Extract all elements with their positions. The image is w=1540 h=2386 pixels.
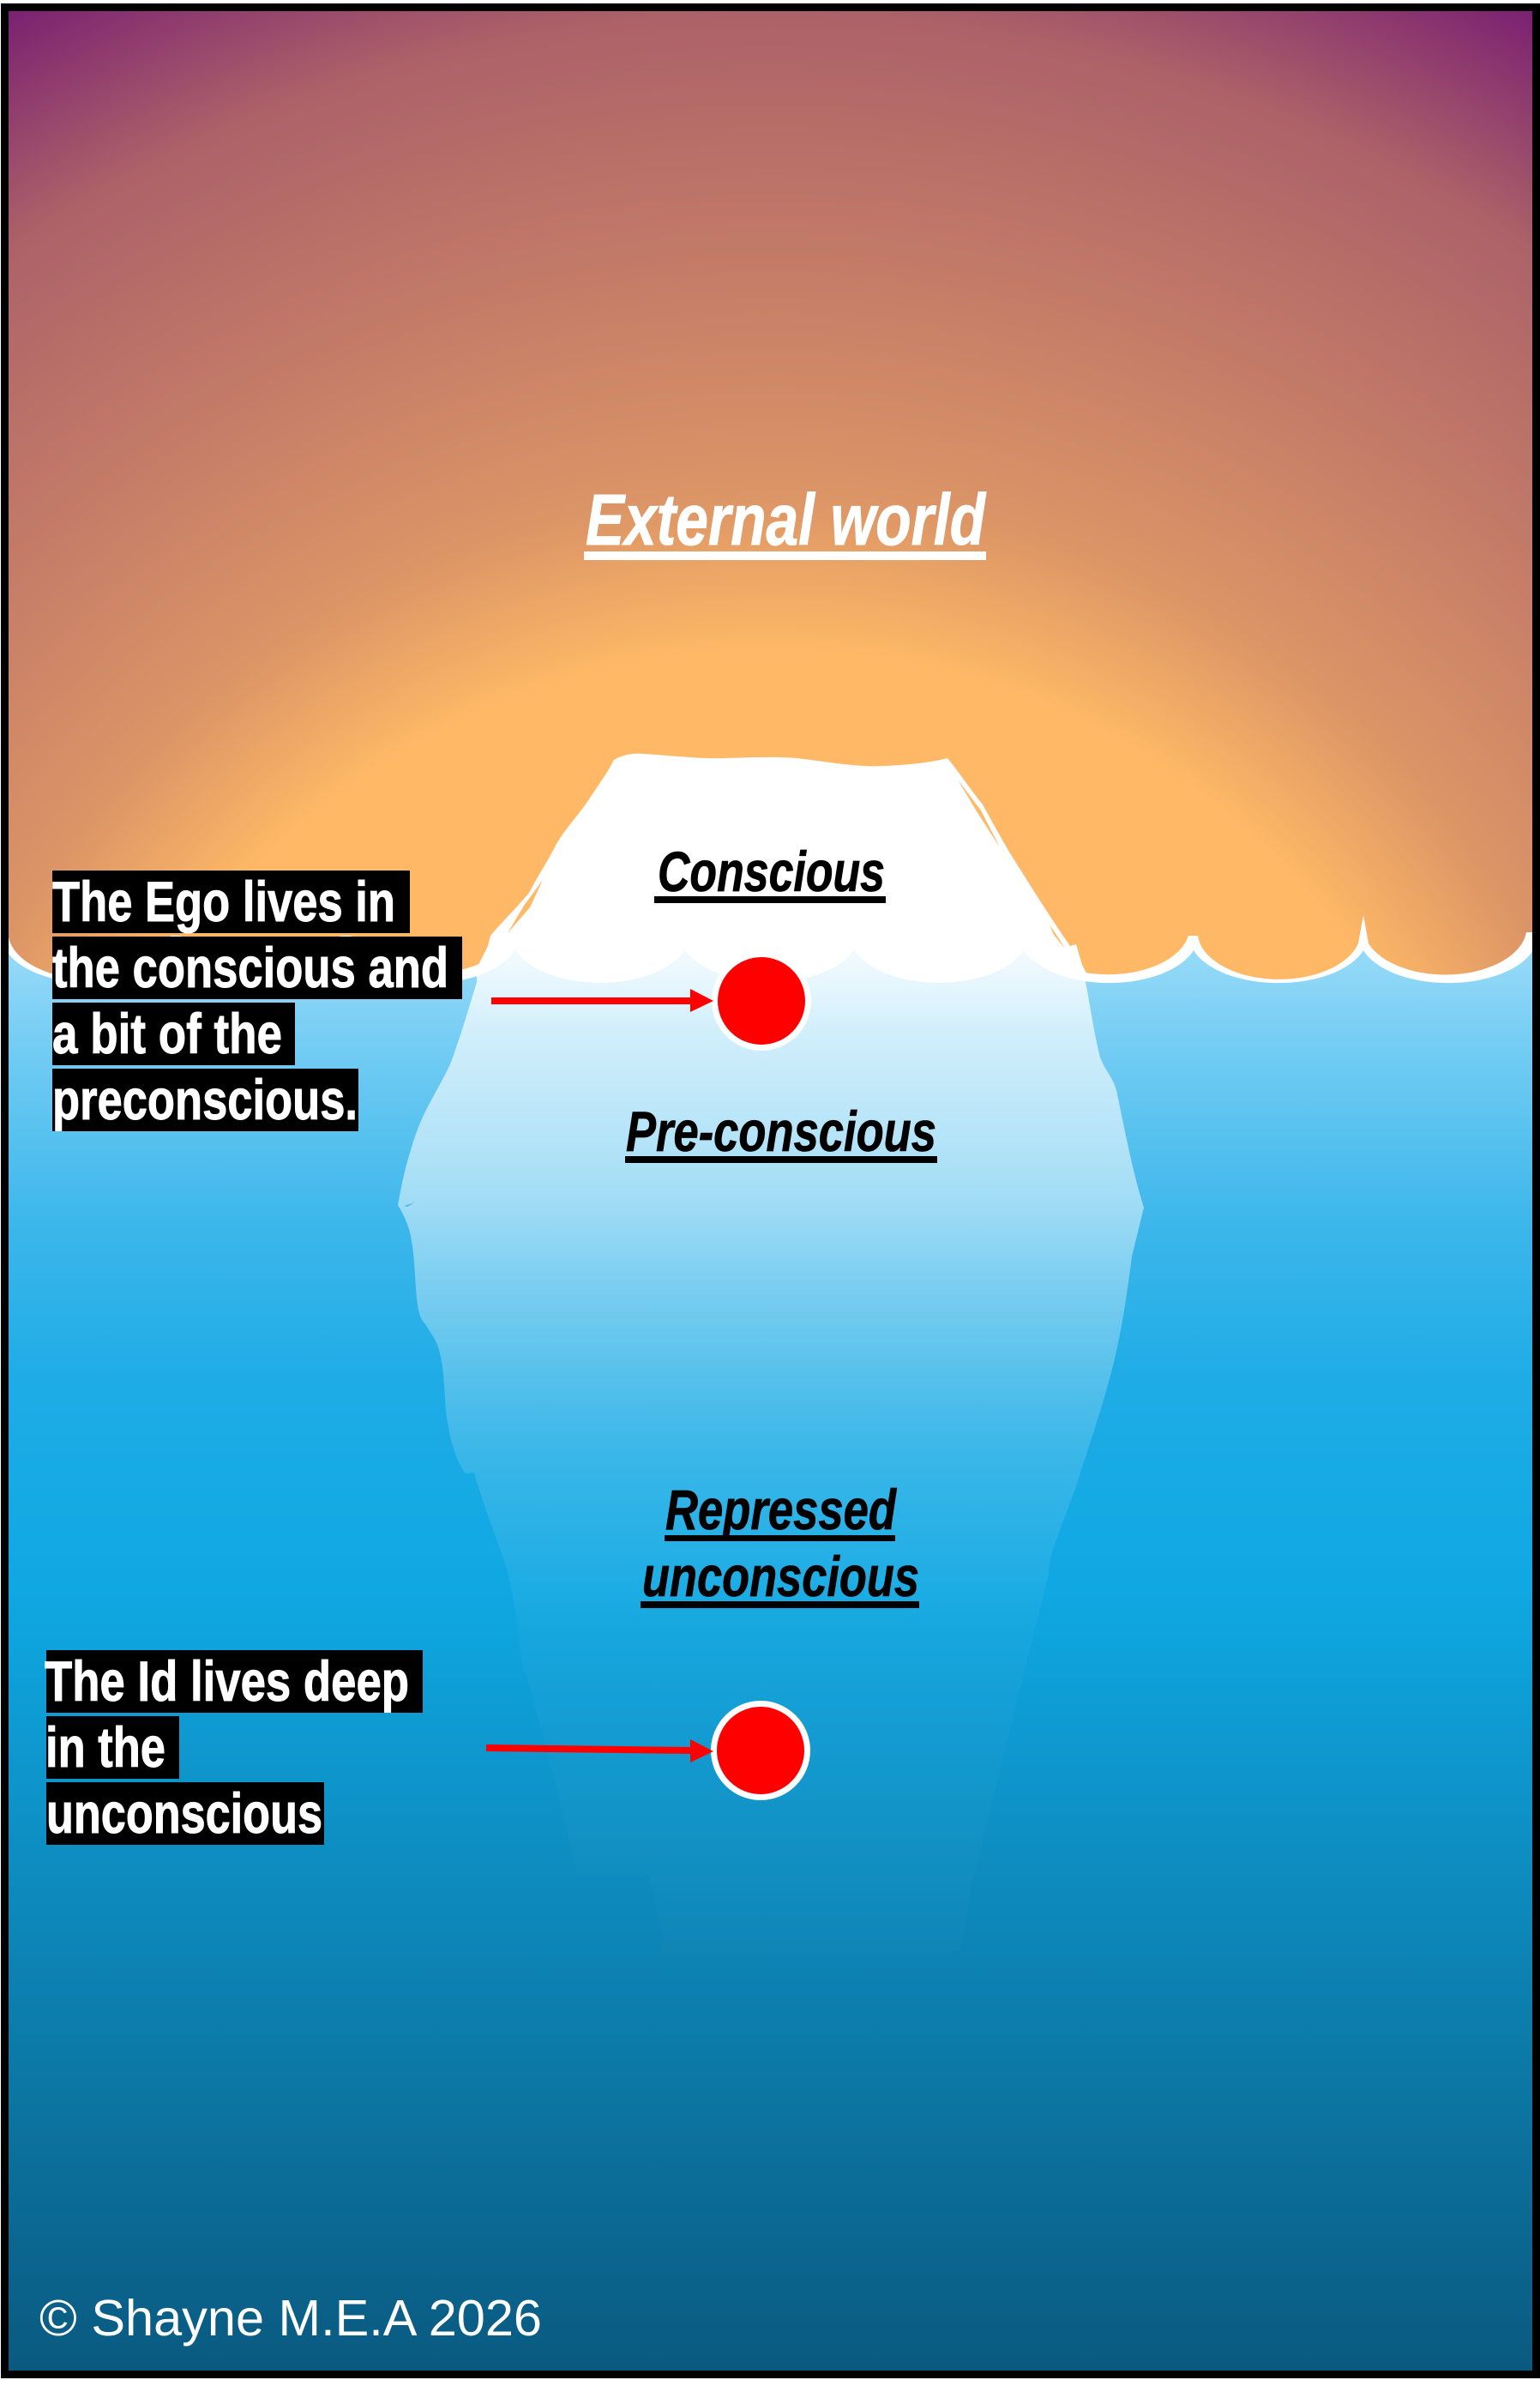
orange cracks in ice xyxy=(508,780,1065,949)
copyright: © Shayne M.E.A 2026 xyxy=(39,2290,542,2347)
iceberg tip above water xyxy=(472,754,1093,986)
callout: the Id xyxy=(45,1649,423,1845)
callout: the Id: The Id lives deep xyxy=(45,1649,409,1713)
callout: the Ego xyxy=(52,870,462,1131)
callout: the Id: unconscious xyxy=(46,1781,322,1845)
iceberg below water xyxy=(398,950,1144,1625)
label: Pre-conscious: Pre-conscious xyxy=(626,1100,936,1163)
marker: Id dot xyxy=(713,1703,808,1798)
small ice cracks xyxy=(404,969,1122,1338)
label: Repressed unconscious: unconscious xyxy=(642,1545,919,1608)
label: Repressed unconscious xyxy=(641,1478,919,1608)
sky: external world background xyxy=(9,11,1532,1040)
callout: the Ego: a bit of the xyxy=(52,1002,282,1065)
marker: Ego dot xyxy=(715,954,808,1048)
callout: the Id: in the xyxy=(45,1715,165,1779)
white wave line xyxy=(9,915,1532,1029)
label: Conscious: Conscious xyxy=(658,840,885,903)
callout: the Ego: the conscious and xyxy=(52,936,448,999)
callout: the Ego: preconscious. xyxy=(52,1068,358,1131)
callout: the Ego: The Ego lives in xyxy=(52,870,395,933)
heading: External world: External world xyxy=(586,479,986,560)
arrow: to Id dot xyxy=(486,1739,713,1762)
sea water xyxy=(9,935,1532,2371)
arrow: to Ego dot xyxy=(491,989,713,1012)
label: Repressed unconscious: Repressed xyxy=(665,1478,897,1541)
